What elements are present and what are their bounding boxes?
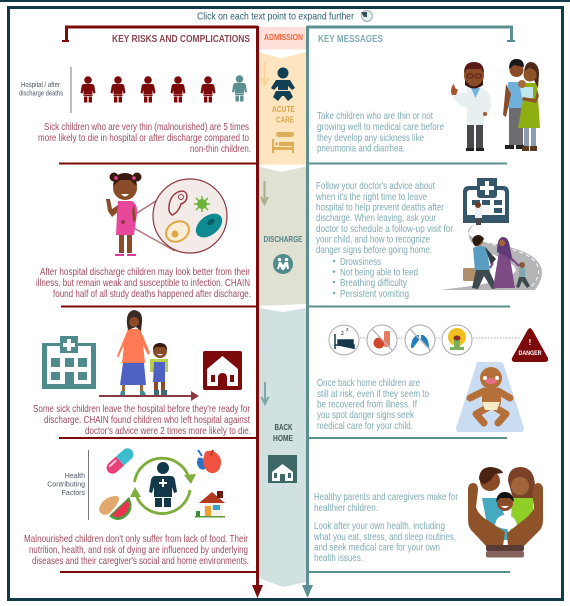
- top strip: [0, 0, 570, 2]
- text: message row 3: still at risk, even if they seem to: [317, 388, 429, 400]
- icon: danger triangle: DANGER: [518, 350, 542, 357]
- icon: child with plus: [149, 462, 177, 507]
- icon: danger triangle: [512, 328, 548, 362]
- text: message row 4: [313, 491, 458, 564]
- text: message row 1: Take children who are thin or not: [317, 110, 433, 122]
- icon: breathing difficulty: [405, 325, 435, 355]
- icon: not feeding: [367, 325, 397, 355]
- text: message row 4: what you eat, stress, and sleep routines,: [313, 531, 456, 543]
- text: risk row 3: discharge. CHAIN found children who left hospital against: [44, 414, 250, 426]
- text: risk row 2: found half of all study deaths happened after discharge.: [53, 288, 251, 300]
- illustration: hands holding family: [468, 467, 543, 558]
- text: message row 2: danger signs before going home:: [316, 244, 432, 256]
- label: discharge: DISCHARGE: [264, 234, 303, 244]
- icon: bed and thermometer: [272, 132, 294, 153]
- text: message row 2: Persistent vomiting: [340, 288, 409, 300]
- heading: key risks: KEY RISKS AND COMPLICATIONS: [112, 33, 250, 45]
- text: risk row 4: Malnourished children don't only suffer from lack of food. Their: [24, 533, 248, 545]
- illustration: mother and child: [117, 310, 168, 395]
- icon: bread: [99, 496, 119, 515]
- text: message row 4: Look after your own health, including: [314, 520, 445, 532]
- label: back home: BACK: [274, 423, 293, 432]
- text: message row 3: [317, 377, 429, 432]
- text: risk row 4: diseases and their caregiver's social and home environments.: [32, 555, 249, 567]
- icon: home: [203, 351, 242, 390]
- axis label: hospital deaths: discharge deaths: [19, 90, 63, 98]
- text: risk row 1: non-thin children.: [190, 143, 251, 155]
- illustration: crying baby: [456, 362, 524, 432]
- label: health contributing factors: Health: [65, 473, 85, 480]
- text: risk row 1: more likely to die in hospital or after discharge compared to: [38, 132, 249, 144]
- central column: acute care panel: [259, 52, 306, 164]
- teal spine arrow with header bracket: [302, 26, 515, 598]
- text: message row 4: healthier children.: [314, 502, 378, 514]
- icon: drowsiness: z: [341, 331, 344, 337]
- right row dividers: [308, 162, 510, 573]
- man with suitcase: [463, 268, 480, 281]
- text: message row 2: Drowsiness: [340, 256, 381, 268]
- text: message row 1: [317, 110, 444, 154]
- text: message row 4: health issues.: [314, 552, 363, 564]
- icon: vomiting: [442, 325, 472, 355]
- arrow: leaving hospital: [99, 391, 199, 401]
- cycle arrows: [134, 458, 190, 514]
- text: risk row 3: doctor's advice were 2 times more likely to die.: [85, 425, 251, 437]
- central column: back home panel: [259, 308, 306, 587]
- icon: discharge walking: [273, 254, 293, 274]
- text: message row 2: Not being able to feed: [340, 266, 418, 278]
- text: message row 1: they develop any sickness like: [317, 132, 424, 144]
- icon: house: [268, 455, 297, 483]
- text: message row 4: and seek medical care for your own: [314, 542, 440, 554]
- text: risk row 3: Some sick children leave the hospital before they're ready for: [33, 403, 250, 415]
- illustration: family: [503, 59, 540, 151]
- central column: admission band: [259, 27, 306, 50]
- central column: admission band: ADMISSION: [264, 32, 303, 42]
- icon: pill: [104, 446, 136, 476]
- text: message row 1: growing well to medical care before: [317, 121, 444, 133]
- label: back home: [273, 423, 294, 443]
- text: message row 2: Follow your doctor's advice about: [316, 180, 435, 192]
- central column: discharge panel: [259, 166, 306, 306]
- instruction text: Click on each text point to expand further: [197, 10, 354, 22]
- text: risk row 2: [36, 266, 251, 300]
- icon: house: [195, 491, 225, 518]
- icon: heart: [197, 450, 221, 473]
- icon: watermelon: [109, 497, 132, 520]
- heading: key messages: KEY MESSAGES: [318, 33, 383, 45]
- diagram: health contributing factors: [99, 446, 225, 520]
- label: back home: HOME: [273, 434, 294, 443]
- axis label: hospital deaths: Hospital / after: [21, 82, 61, 89]
- pictogram: 5 of 6 children: [80, 75, 247, 102]
- text: risk row 2: After hospital discharge children may look better from their: [40, 266, 250, 278]
- text: message row 1: pneumonia and diarrhea.: [317, 142, 405, 154]
- label: health contributing factors: Factors: [62, 490, 85, 497]
- axis label: hospital deaths: [19, 82, 63, 98]
- arrow: discharge: [261, 181, 268, 204]
- icon: baby: [271, 68, 295, 101]
- text: message row 2: your child, and how to recognize: [316, 234, 430, 246]
- danger signs row: [329, 325, 548, 362]
- illustration: hospital: [42, 336, 96, 389]
- arrow: back home: [262, 382, 268, 404]
- text: message row 2: Breathing difficulty: [340, 277, 408, 289]
- text: message row 2: when it's the right time to leave: [315, 191, 427, 203]
- red spine arrow with header bracket: [62, 26, 263, 598]
- arrow: acute care: [261, 62, 268, 85]
- illustration: girl: [106, 172, 142, 256]
- woman: [493, 249, 515, 288]
- text: risk row 4: nutrition, health, and risk of dying are influenced by underlying: [29, 544, 248, 556]
- text: message row 2: discharge. When leaving, ask your: [316, 212, 436, 224]
- icon: drowsiness: z: [346, 327, 349, 333]
- icon: danger triangle: !: [529, 338, 531, 347]
- label: acute care: CARE: [276, 116, 295, 124]
- text: message row 2: [315, 180, 453, 300]
- small child: [519, 262, 525, 268]
- label: acute care: [272, 105, 296, 124]
- text: risk row 1: Sick children who are very thin (malnourished) are 5 times: [44, 121, 249, 133]
- text: message row 3: you spot danger signs seek: [317, 409, 415, 421]
- magnifier lens: germs: [123, 179, 227, 253]
- icon: drowsiness: [329, 325, 359, 355]
- text: risk row 1: [38, 121, 251, 155]
- text: message row 2: hospital to help prevent deaths after: [316, 202, 444, 214]
- left row dividers: [59, 162, 257, 573]
- label: health contributing factors: [47, 473, 85, 497]
- text: message row 4: Healthy parents and caregivers make for: [314, 491, 458, 503]
- text: message row 2: doctor to schedule a follow-up visit for: [316, 223, 453, 235]
- text: message row 3: Once back home children are: [317, 377, 420, 389]
- illustration: hospital, road and family: [440, 178, 542, 290]
- text: risk row 2: illness, but remain weak and susceptible to infection. CHAIN: [36, 277, 250, 289]
- label: acute care: ACUTE: [272, 105, 296, 114]
- label: health contributing factors: Contributing: [47, 482, 85, 488]
- text: message row 3: be recovered from illness. If: [317, 398, 417, 410]
- text: risk row 4: [24, 533, 249, 567]
- small doctor on road: [475, 202, 482, 225]
- illustration: doctor: [451, 62, 491, 151]
- text: risk row 3: [33, 403, 251, 437]
- text: message row 3: medical care for your child.: [317, 420, 413, 432]
